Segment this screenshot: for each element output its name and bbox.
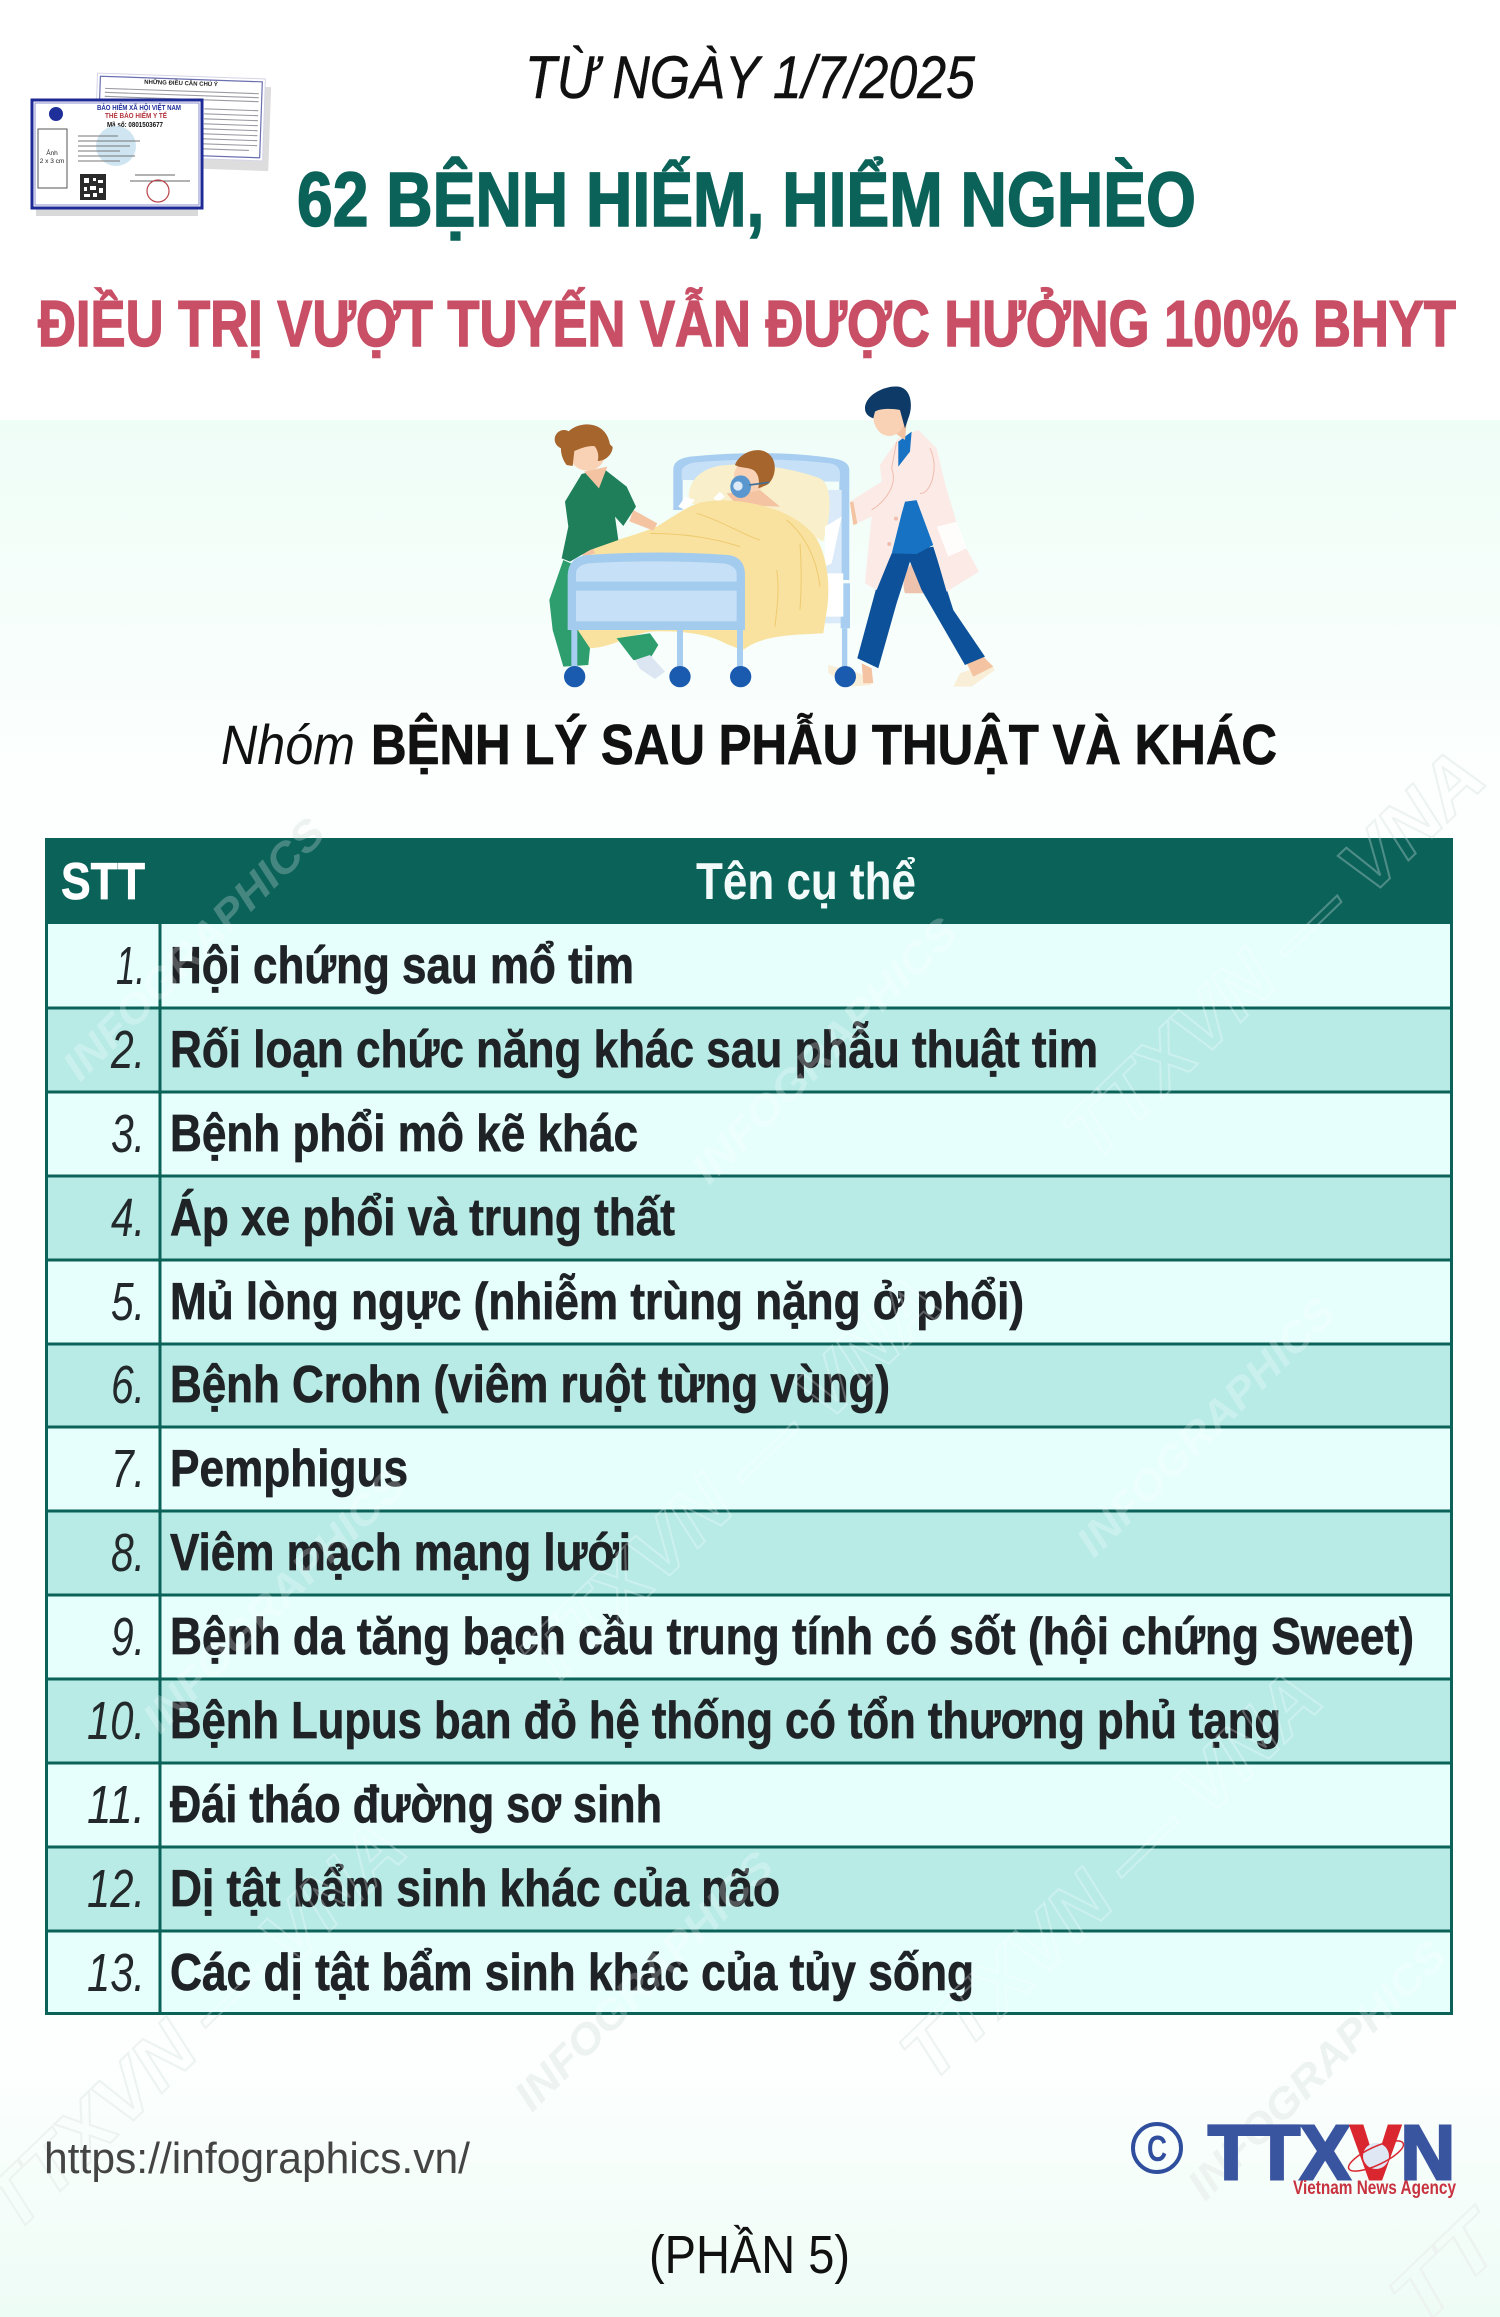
row 11: 11. xyxy=(87,1775,145,1835)
background watermarks: INFOGRAPHICS xyxy=(1178,1931,1455,2208)
nurse xyxy=(549,424,665,679)
icon: health insurance cards: Ảnh xyxy=(46,148,58,157)
back of card xyxy=(94,73,271,171)
patient xyxy=(678,450,780,510)
group heading: BỆNH LÝ SAU PHẪU THUẬT VÀ KHÁC xyxy=(371,712,1277,777)
table watermarks xyxy=(64,838,1433,2015)
table watermarks: INFOGRAPHICS xyxy=(682,908,966,1192)
row 9: 9. xyxy=(111,1607,145,1667)
table watermarks: INFOGRAPHICS xyxy=(1067,1288,1344,1565)
table watermarks: INFOGRAPHICS xyxy=(133,1461,414,1741)
table row backgrounds xyxy=(45,924,1453,2015)
doctor xyxy=(828,386,995,687)
title: main heading: 62 BỆNH HIẾM, HIỂM NGHÈO xyxy=(297,156,1196,243)
title: date line: TỪ NGÀY 1/7/2025 xyxy=(525,44,976,111)
row 12: Dị tật bẩm sinh khác của não xyxy=(170,1860,780,1918)
illustration: nurse and doctor moving patient bed xyxy=(549,386,995,687)
pillow xyxy=(689,464,830,542)
table watermarks: TTXVN — VNA xyxy=(1047,733,1500,1176)
row 7: 7. xyxy=(111,1439,145,1499)
bed wheels xyxy=(564,666,856,687)
row 1: 1. xyxy=(116,936,145,996)
part label: (PHẦN 5) xyxy=(649,2225,850,2285)
background watermarks: TTXVN — VNA xyxy=(884,1654,1338,2097)
row 7 xyxy=(111,1439,408,1499)
row 1: Hội chứng sau mổ tim xyxy=(170,937,634,995)
row 4: 4. xyxy=(111,1188,145,1248)
icon: health insurance cards: THẺ BẢO HIỂM Y TẾ xyxy=(105,110,167,120)
logo: TTXVN copyright: TTXVN xyxy=(1208,2110,1455,2196)
row 13: Các dị tật bẩm sinh khác của tủy sống xyxy=(170,1944,974,2002)
row 2: Rối loạn chức năng khác sau phẫu thuật tim xyxy=(170,1021,1098,1079)
background watermarks: INFOGRAPHICS xyxy=(505,1842,782,2119)
row 10: 10. xyxy=(87,1691,145,1751)
background watermarks: TTXVN — VNA xyxy=(1047,733,1500,1176)
copyright symbol: C xyxy=(1147,2128,1167,2169)
blanket xyxy=(567,500,828,650)
row 6: Bệnh Crohn (viêm ruột từng vùng) xyxy=(170,1356,890,1414)
table watermarks: TTXVN — VNA xyxy=(884,1654,1338,2097)
background watermarks xyxy=(0,733,1500,2317)
row 10: Bệnh Lupus ban đỏ hệ thống có tổn thương phủ tạng xyxy=(170,1692,1281,1750)
row 8: Viêm mạch mạng lưới xyxy=(170,1524,631,1582)
row 12: 12. xyxy=(87,1859,145,1919)
row 4: Áp xe phổi và trung thất xyxy=(170,1189,675,1247)
globe and orbit xyxy=(1345,2135,1407,2177)
row 6: 6. xyxy=(111,1355,145,1415)
icon: health insurance cards xyxy=(32,73,271,216)
footboard xyxy=(568,552,745,668)
row 7: Pemphigus xyxy=(170,1440,408,1498)
row 2: 2. xyxy=(110,1020,145,1080)
background watermarks: INFOGRAPHICS xyxy=(53,809,334,1089)
icon: health insurance cards: 2 x 3 cm xyxy=(40,158,64,165)
copyright symbol xyxy=(1133,2124,1181,2172)
row 5: 5. xyxy=(111,1272,145,1332)
table watermarks: TTXVN — VNA xyxy=(504,1259,958,1702)
table watermarks: INFOGRAPHICS xyxy=(505,1842,782,2119)
table xyxy=(45,838,1453,2015)
back of card: NHỮNG ĐIỀU CẦN CHÚ Ý xyxy=(144,79,218,88)
row 8: 8. xyxy=(111,1523,145,1583)
front of card xyxy=(36,204,198,216)
group heading: Nhóm xyxy=(221,713,355,776)
headboard xyxy=(673,453,850,668)
logo: TTXVN copyright: Vietnam News Agency xyxy=(1293,2178,1456,2199)
sheet xyxy=(825,517,843,617)
row 3: 3. xyxy=(111,1104,145,1164)
row 3: Bệnh phổi mô kẽ khác xyxy=(170,1105,638,1163)
table header: STT xyxy=(61,853,145,911)
table header xyxy=(45,838,1453,926)
icon: health insurance cards: Mã số: 0801503677 xyxy=(107,121,163,129)
row 5: Mủ lòng ngực (nhiễm trùng nặng ở phổi) xyxy=(170,1273,1024,1331)
icon: health insurance cards: BẢO HIỂM XÃ HỘI VIỆT NAM xyxy=(97,103,181,112)
table header: Tên cụ thể xyxy=(696,853,916,911)
table watermarks: INFOGRAPHICS xyxy=(53,809,334,1089)
table watermarks: INFOGRAPHICS xyxy=(1178,1931,1455,2208)
row 11: Đái tháo đường sơ sinh xyxy=(170,1776,662,1834)
footer url: https://infographics.vn/ xyxy=(44,2134,471,2183)
row 13: 13. xyxy=(87,1943,145,2003)
